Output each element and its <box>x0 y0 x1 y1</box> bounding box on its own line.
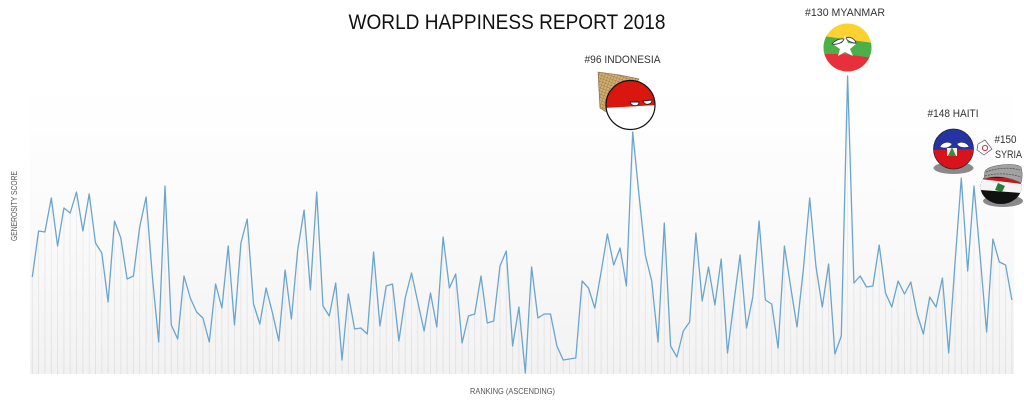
y axis label: GENEROSITY SCORE <box>10 171 19 241</box>
line chart: generosity score by ranking <box>32 76 1012 374</box>
x axis label: RANKING (ASCENDING) <box>470 387 555 396</box>
label: Myanmar: #130 MYANMAR <box>805 7 885 19</box>
chart background <box>30 85 1014 374</box>
icon: Indonesia countryball <box>598 72 658 132</box>
label: Indonesia: #96 INDONESIA <box>584 54 661 66</box>
label: Syria: #150 <box>994 134 1016 146</box>
icon: Myanmar countryball <box>823 23 873 73</box>
icon: Haiti countryball <box>933 128 974 174</box>
data line <box>32 76 1012 373</box>
vertical drop lines <box>32 76 1012 374</box>
title: WORLD HAPPINESS REPORT 2018 <box>348 11 666 34</box>
icon: small flag speech bubble <box>977 140 992 155</box>
label: Haiti: #148 HAITI <box>928 108 978 120</box>
icon: Syria countryball <box>980 164 1024 207</box>
